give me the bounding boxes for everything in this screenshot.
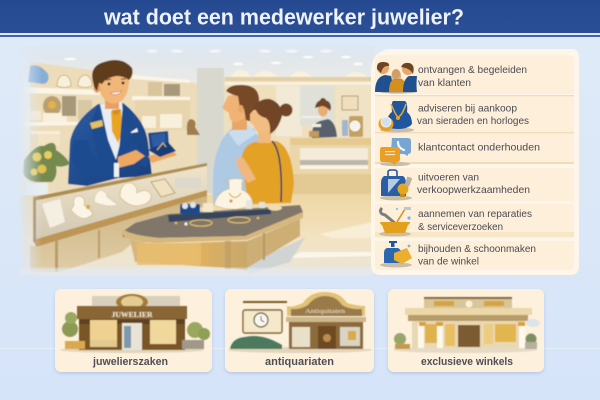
front counter with jewellery tray bbox=[122, 179, 303, 270]
necklace bust on counter bbox=[214, 179, 253, 209]
text: duty 1: van klanten bbox=[418, 78, 471, 89]
text: duty 4: verkoopwerkzaamheden bbox=[417, 185, 530, 196]
sign text: JUWELIER bbox=[112, 310, 153, 319]
display tray bbox=[168, 200, 282, 222]
text: duty 1: ontvangen & begeleiden bbox=[418, 65, 527, 76]
man bbox=[213, 128, 266, 205]
row 1: receiving customers bbox=[375, 55, 574, 96]
left wall shelves with jewellery bbox=[24, 65, 200, 146]
text: duty 5: & serviceverzoeken bbox=[418, 222, 503, 233]
flower arrangement bbox=[23, 143, 70, 195]
label: juwelierszaken bbox=[92, 356, 168, 368]
label: antiquariaten bbox=[265, 356, 334, 368]
row 5: repairs bbox=[375, 204, 574, 238]
staff figure bbox=[309, 98, 337, 138]
label: exclusieve winkels bbox=[421, 356, 513, 368]
illustration: jeweller shopfront bbox=[60, 294, 210, 353]
scale bbox=[342, 116, 363, 137]
text: duty 6: van de winkel bbox=[418, 256, 479, 268]
icon: necklace and watch bbox=[378, 101, 414, 132]
row 4: sales tasks bbox=[375, 168, 574, 201]
title: wat doet een medewerker juwelier? bbox=[103, 4, 464, 30]
head bbox=[104, 100, 120, 110]
shop background wall and ceiling bbox=[20, 46, 375, 196]
icon: phone and chat bubbles bbox=[380, 138, 411, 166]
back counter and staff member with scale bbox=[290, 96, 374, 195]
row 3: customer contact bbox=[375, 134, 574, 166]
sign text: Antiquitaten bbox=[305, 309, 345, 315]
row 6: cleaning bbox=[375, 241, 574, 270]
header banner bbox=[0, 0, 600, 37]
text: duty 6: bijhouden & schoonmaken bbox=[418, 244, 536, 255]
text: duty 2: van sieraden en horloges bbox=[417, 116, 529, 127]
panel: duties list bbox=[371, 49, 579, 275]
card: exclusieve winkels bbox=[388, 289, 544, 372]
illustration: luxury storefront bbox=[393, 297, 540, 353]
jewellery box bbox=[148, 131, 176, 157]
illustration: antique shopfront with hanging clock bbox=[228, 292, 372, 353]
icon: staff with customers bbox=[375, 62, 417, 94]
customer couple bbox=[213, 85, 294, 205]
row 2: advising on jewellery bbox=[375, 97, 574, 134]
text: duty 3: klantcontact onderhouden bbox=[418, 142, 540, 154]
icon: shopping bag and tag bbox=[380, 170, 412, 200]
icon: tools in basket bbox=[379, 207, 411, 236]
illustration: jewellery store scene bbox=[20, 46, 375, 275]
text: duty 4: uitvoeren van bbox=[418, 172, 479, 184]
card: juwelierszaken bbox=[55, 289, 212, 372]
text: duty 2: adviseren bij aankoop bbox=[418, 104, 517, 114]
woman bbox=[241, 141, 294, 204]
salesperson in blue suit bbox=[68, 60, 177, 186]
icon: soap and sponge bbox=[380, 241, 412, 267]
card: antiquariaten bbox=[225, 289, 374, 372]
text: duty 5: aannemen van reparaties bbox=[418, 209, 532, 220]
glass display case with necklaces bbox=[30, 163, 207, 272]
shop floor bbox=[20, 195, 375, 275]
